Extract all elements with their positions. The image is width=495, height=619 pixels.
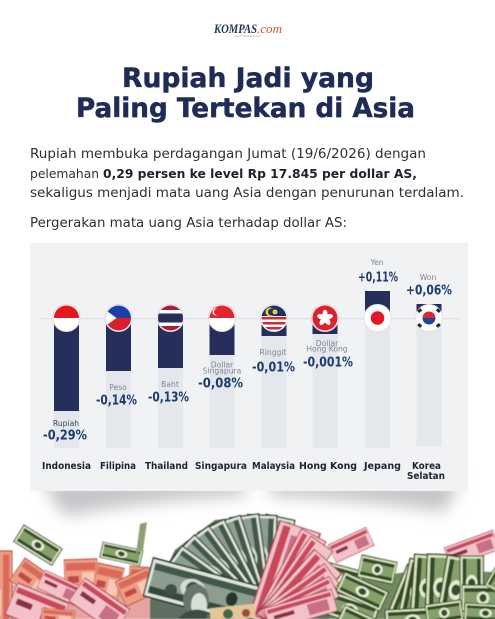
panel shadow [40,480,460,516]
label: Thailand: Thailand [145,461,188,472]
label: Malaysia [252,348,295,472]
intro text block: pelemahan 0,29 persen ke level Rp 17.845 per dollar AS, [30,167,417,182]
bars: tracks [54,318,442,448]
illustration: banknotes [0,514,495,619]
label: Thailand [145,380,189,472]
flag: Singapore [208,304,236,332]
flag: South Korea [416,304,442,332]
intro text block: sekaligus menjadi mata uang Asia dengan penurunan terdalam. [30,186,464,201]
flying notes [14,525,62,565]
zero line [40,318,460,319]
label: Korea Selatan: Selatan [407,471,445,482]
flag: Thailand [157,304,184,332]
panel: chart [30,243,468,491]
label: Filipina: Filipina [100,461,136,472]
chart subtitle: Pergerakan mata uang Asia terhadap dollar AS: [30,216,347,231]
label: Hong Kong [299,339,357,472]
label: Thailand: Baht [161,380,179,389]
label: Malaysia: -0,01% [252,360,295,376]
label: Jepang: Jepang [363,461,401,472]
pile backing [0,585,150,619]
label: Singapura: -0,08% [198,376,243,392]
label: Singapura: Singapura [195,461,247,472]
label: Filipina [96,383,137,472]
label: Hong Kong: Hong Kong [299,461,357,472]
label: Singapura: Dollar [211,360,234,370]
logo: Kompas.com: KOMPAS [213,22,257,36]
title: Rupiah Jadi yang [122,63,374,94]
label: Indonesia: -0,29% [43,428,87,444]
label: Filipina: Peso [109,383,127,392]
label: Indonesia: Rupiah [53,419,79,428]
title [76,63,415,124]
flag: Hong Kong [312,304,338,332]
label: Korea Selatan: Won [420,273,436,282]
label: Filipina: -0,14% [96,392,137,408]
bars: values [54,291,442,411]
logo: Kompas.com: .com [257,22,282,36]
label: Jepang: Yen [369,258,384,267]
intro text block [30,147,464,201]
flag: Philippines [105,304,132,332]
title: Paling Tertekan di Asia [76,93,415,124]
label: Malaysia: Malaysia [252,461,295,472]
label: Singapura [195,360,247,472]
logo: Kompas.com: Jernih Melihat Dunia [234,34,261,38]
central fan: rupiah [249,521,320,619]
portrait on front note [165,584,209,619]
label: Malaysia: Ringgit [260,348,286,357]
flag: Japan [364,304,391,332]
bottom centre notes [209,604,256,619]
label: Jepang [358,258,401,472]
right pile: dollars [306,558,364,595]
left pile: rupiah [0,551,12,619]
flag: Malaysia [260,304,288,332]
label: Hong Kong: -0,001% [303,354,353,370]
label: Hong Kong: Hong Kong [306,344,348,354]
label: Jepang: +0,11% [358,270,398,286]
flag: Indonesia [53,304,80,332]
central fan: dollars [244,514,295,619]
label: Korea Selatan: Korea [412,461,441,472]
label: Indonesia: Indonesia [42,461,91,472]
label: Korea Selatan [406,273,452,482]
label: Thailand: -0,13% [148,390,189,406]
logo: Kompas.com [213,22,282,38]
label: Indonesia [42,419,91,472]
label: Singapura: Singapura [203,366,241,376]
intro text block: Rupiah membuka perdagangan Jumat (19/6/2026) dengan [30,147,426,162]
label: Korea Selatan: +0,06% [406,282,452,298]
label: Hong Kong: Dollar [316,339,339,348]
